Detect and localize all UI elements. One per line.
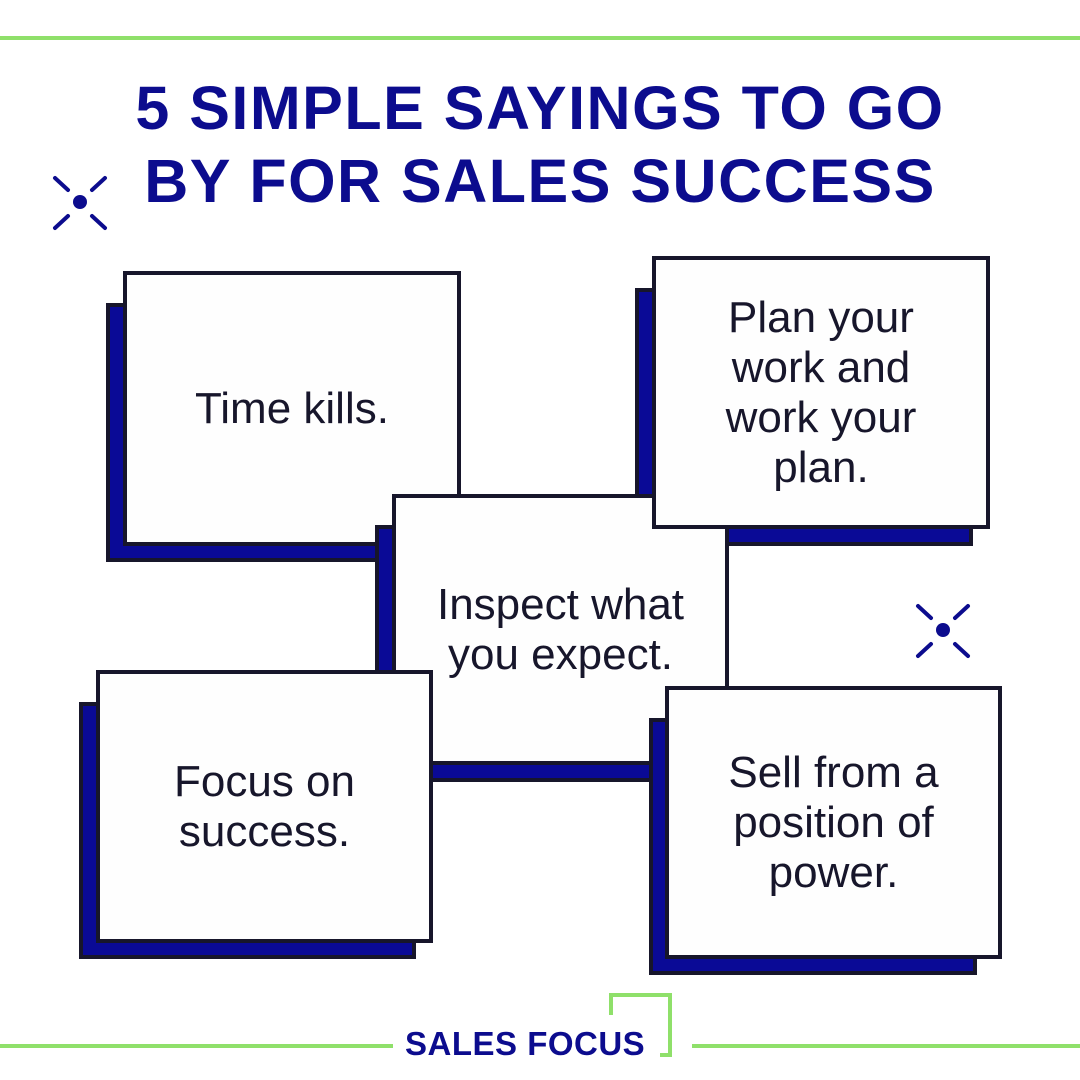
- card: plan: plan.: [773, 442, 869, 492]
- card: time kills: Time kills.: [195, 384, 389, 432]
- card: plan: work your: [726, 392, 916, 442]
- card: focus: success.: [179, 806, 350, 856]
- title: 5 SIMPLE SAYINGS TO GO: [135, 74, 945, 142]
- title: BY FOR SALES SUCCESS: [144, 147, 936, 215]
- icon: sparkle right: [916, 604, 970, 658]
- card: time kills: [123, 271, 461, 546]
- card: plan: [652, 256, 990, 529]
- card: sell: Sell from a: [728, 748, 939, 796]
- card: inspect: [392, 494, 729, 765]
- icon: sparkle left: [52, 176, 108, 230]
- card: focus: [96, 670, 433, 943]
- title: [135, 74, 945, 215]
- card: inspect: you expect.: [448, 630, 673, 678]
- card: plan: Plan your: [728, 292, 914, 342]
- logo: SALES FOCUS: [405, 1025, 645, 1062]
- card: sell: position of: [733, 798, 934, 846]
- logo: [405, 993, 672, 1062]
- card: plan: work and: [732, 342, 910, 392]
- card: sell: power.: [769, 848, 898, 896]
- card: inspect: Inspect what: [437, 580, 684, 628]
- card: sell: [665, 686, 1002, 959]
- card: focus: Focus on: [174, 756, 355, 806]
